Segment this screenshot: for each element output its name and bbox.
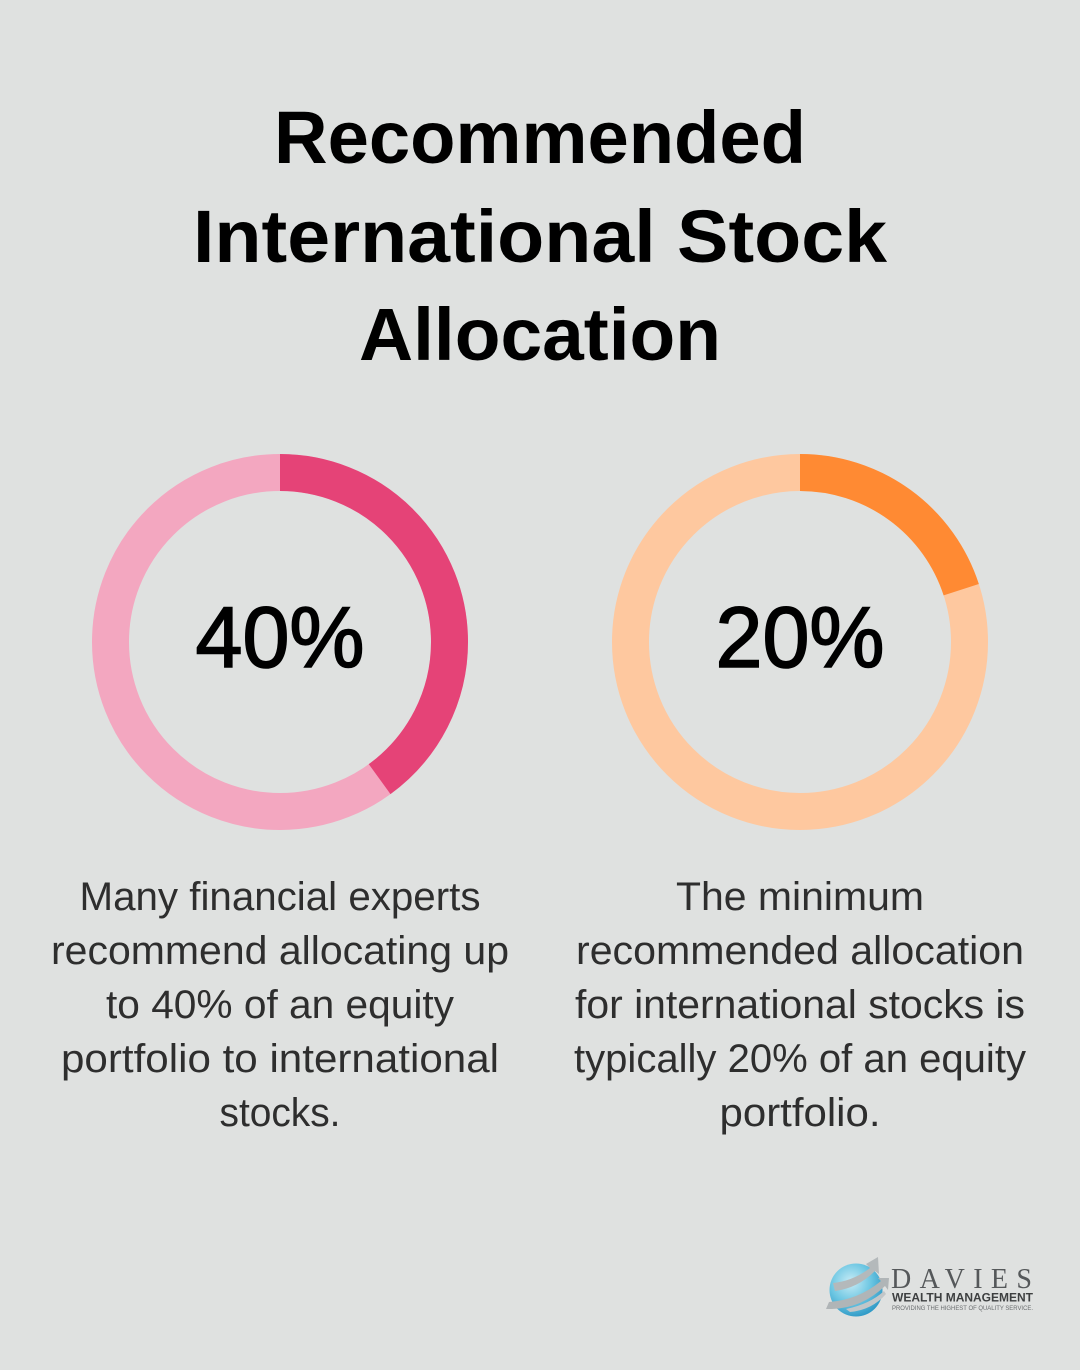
description: 20%: recommended allocation [576,929,1024,973]
icon: globe with arrows [826,1257,889,1316]
description: 40%: to 40% of an equity [106,983,454,1027]
wordmark subtitle: WEALTH MANAGEMENT [892,1290,1034,1304]
title: Allocation [359,293,721,376]
description: 40%: portfolio to international [61,1037,499,1081]
description: 40% [51,875,509,1135]
tagline: PROVIDING THE HIGHEST OF QUALITY SERVICE. [892,1305,1033,1312]
description: 20%: for international stocks is [575,983,1025,1027]
title: International Stock [193,195,888,278]
value: 20%: 20% [716,590,884,686]
wordmark: DAVIES [891,1264,1032,1295]
title [193,96,888,376]
panel: 20% statistic [574,472,1026,1135]
panel: 40% statistic [51,472,509,1135]
description: 40%: recommend allocating up [51,929,509,973]
description: 20% [574,875,1026,1135]
description: 40%: Many financial experts [80,875,480,919]
title: Recommended [274,96,806,179]
description: 20%: The minimum [676,875,924,919]
donut chart: 20% [630,472,970,812]
logo: Davies Wealth Management [826,1257,1034,1316]
value: 40%: 40% [196,590,364,686]
description: 20%: typically 20% of an equity [574,1037,1026,1081]
donut chart: 40% [110,472,450,812]
description: 40%: stocks. [220,1091,340,1135]
description: 20%: portfolio. [720,1091,880,1135]
